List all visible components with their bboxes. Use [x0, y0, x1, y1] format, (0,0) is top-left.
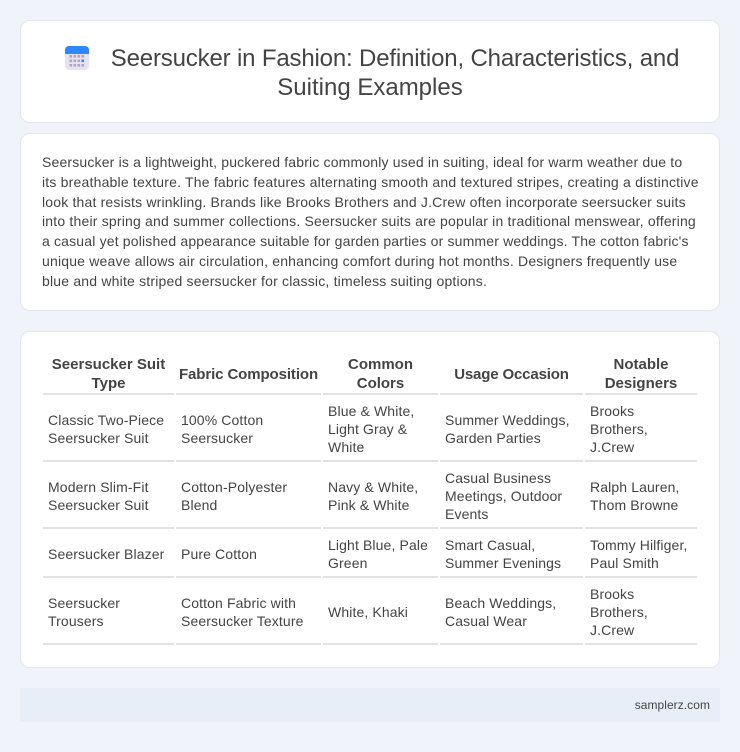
row 2 fabric: Cotton-Polyester: [181, 479, 287, 495]
header: occasion: Usage Occasion: [454, 366, 569, 383]
row 3 occasion: Summer Evenings: [445, 555, 561, 571]
header: colors: [348, 356, 413, 392]
row 1 designers: [590, 403, 648, 455]
row 1 colors: [328, 403, 414, 455]
row 1 occasion: [445, 412, 570, 446]
row 2 colors: Navy & White,: [328, 479, 418, 495]
row 1 designers: Brooks: [590, 403, 634, 419]
panel: table card: [20, 331, 720, 668]
text block: description: a casual yet polished appearance suitable for garden parties or summer weddings. The cotton fabric's: [42, 233, 689, 249]
icon: calendar: [65, 46, 89, 70]
row 2 type: Seersucker Suit: [48, 497, 149, 513]
header: colors: Colors: [357, 375, 404, 392]
text block: description: unique weave allows air circulation, enhancing comfort during hot months. Designers frequently use: [42, 253, 677, 269]
header: fabric: Fabric Composition: [179, 366, 318, 383]
title: [111, 45, 679, 101]
row 2 occasion: Meetings, Outdoor: [445, 488, 562, 504]
row 4 occasion: [445, 595, 556, 629]
header: suit type: Type: [92, 375, 125, 392]
row 3 designers: Paul Smith: [590, 555, 659, 571]
row 3 occasion: [445, 537, 561, 571]
row 3 type: Seersucker Blazer: [48, 546, 164, 562]
text block: description: blue and white striped seersucker for classic, timeless suiting options.: [42, 273, 487, 289]
row 2 type: Modern Slim-Fit: [48, 479, 149, 495]
title: Seersucker in Fashion: Definition, Characteristics, and: [111, 45, 679, 72]
row 1 fabric: [181, 412, 263, 446]
row 1 colors: Blue & White,: [328, 403, 414, 419]
header: suit type: [52, 356, 166, 392]
row 2 designers: Thom Browne: [590, 497, 678, 513]
row 1 type: [48, 412, 164, 446]
row 2 colors: Pink & White: [328, 497, 410, 513]
row 2 fabric: [181, 479, 287, 513]
row 1 fabric: Seersucker: [181, 430, 253, 446]
header: colors: Common: [348, 356, 413, 373]
row 4 designers: J.Crew: [590, 622, 634, 638]
panel: description card: [20, 133, 720, 311]
row 3 occasion: Smart Casual,: [445, 537, 535, 553]
row 4 occasion: Beach Weddings,: [445, 595, 556, 611]
row 3 colors: [328, 537, 428, 571]
row 1 colors: Light Gray &: [328, 421, 407, 437]
row 4 fabric: Cotton Fabric with: [181, 595, 296, 611]
row 4 fabric: [181, 595, 304, 629]
panel: title card: [20, 20, 720, 123]
row 4 designers: Brooks: [590, 586, 634, 602]
row 2 designers: [590, 479, 680, 513]
row 4 designers: [590, 586, 648, 638]
row 3 designers: [590, 537, 687, 571]
row 1 colors: White: [328, 439, 364, 455]
row 2 colors: [328, 479, 418, 513]
text block: description: look that resists wrinkling. Brands like Brooks Brothers and J.Crew often incorporate seersucker suits: [42, 194, 686, 210]
row 2 fabric: Blend: [181, 497, 217, 513]
row 2 type: [48, 479, 149, 513]
text block: description: Seersucker is a lightweight, puckered fabric commonly used in suiting, ideal for warm weather due to: [42, 154, 682, 170]
row 3 fabric: Pure Cotton: [181, 546, 257, 562]
text block: description: its breathable texture. The fabric features alternating smooth and textured stripes, creating a distinctive: [42, 174, 699, 190]
row 2 designers: Ralph Lauren,: [590, 479, 680, 495]
row 4 designers: Brothers,: [590, 604, 648, 620]
row 3 designers: Tommy Hilfiger,: [590, 537, 687, 553]
row 3 colors: Light Blue, Pale: [328, 537, 428, 553]
row 2 occasion: Casual Business: [445, 470, 551, 486]
row 1 occasion: Garden Parties: [445, 430, 541, 446]
header: designers: [605, 356, 677, 392]
row 2 occasion: [445, 470, 562, 522]
header: suit type: Seersucker Suit: [52, 356, 165, 373]
row 3 colors: Green: [328, 555, 368, 571]
row 2 occasion: Events: [445, 506, 489, 522]
title: Suiting Examples: [277, 74, 463, 101]
header: designers: Notable: [613, 356, 668, 373]
row 4 colors: White, Khaki: [328, 604, 408, 620]
row 1 type: Seersucker Suit: [48, 430, 149, 446]
row 1 occasion: Summer Weddings,: [445, 412, 570, 428]
text block: description: [42, 154, 699, 289]
footer text: samplerz.com: [635, 698, 710, 712]
row 4 occasion: Casual Wear: [445, 613, 527, 629]
row 4 type: Trousers: [48, 613, 104, 629]
row 1 designers: Brothers,: [590, 421, 648, 437]
row 4 type: Seersucker: [48, 595, 120, 611]
row 1 type: Classic Two-Piece: [48, 412, 164, 428]
footer bar: [20, 688, 720, 722]
text block: description: into their spring and summer collections. Seersucker suits are popular in traditional menswear, offering: [42, 213, 696, 229]
row 4 fabric: Seersucker Texture: [181, 613, 304, 629]
row 1 fabric: 100% Cotton: [181, 412, 263, 428]
row 1 designers: J.Crew: [590, 439, 634, 455]
header: designers: Designers: [605, 375, 677, 392]
row 4 type: [48, 595, 120, 629]
